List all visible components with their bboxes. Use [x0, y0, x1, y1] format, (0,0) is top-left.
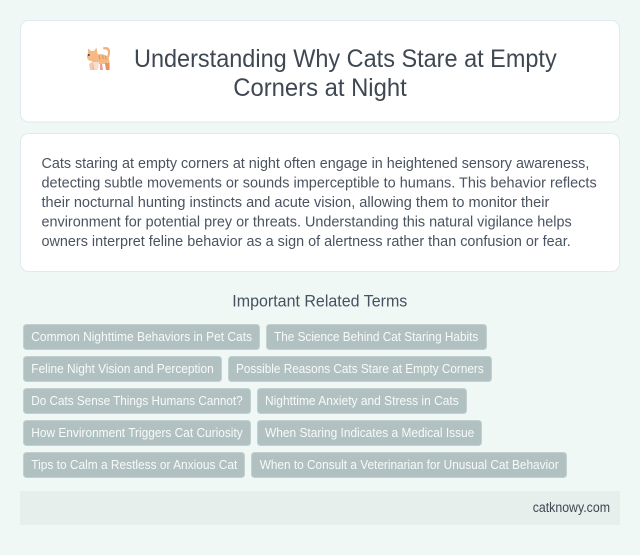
title — [134, 45, 557, 102]
tag — [266, 324, 486, 350]
footer bar — [20, 491, 620, 525]
tag — [228, 356, 492, 382]
panel: description card — [20, 134, 620, 272]
tag: Tips to Calm a Restless or Anxious Cat — [31, 457, 238, 472]
tag — [252, 452, 566, 478]
tag — [24, 420, 250, 446]
tag — [24, 324, 260, 350]
description text: detecting subtle movements or sounds imperceptible to humans. This behavior reflects — [42, 174, 597, 192]
icon: cat — [87, 47, 110, 70]
tag: The Science Behind Cat Staring Habits — [274, 329, 479, 344]
tag — [24, 356, 222, 382]
footer text: catknowy.com — [533, 500, 610, 515]
title: Understanding Why Cats Stare at Empty — [134, 45, 557, 73]
tag: Possible Reasons Cats Stare at Empty Corners — [236, 361, 484, 376]
tag — [258, 420, 482, 446]
tag: Feline Night Vision and Perception — [31, 361, 214, 376]
panel: title card — [20, 20, 620, 122]
tag: How Environment Triggers Cat Curiosity — [31, 425, 243, 440]
title: Corners at Night — [233, 74, 407, 102]
tag: When Staring Indicates a Medical Issue — [265, 425, 474, 440]
panel: related term tags — [24, 324, 566, 478]
description text: Cats staring at empty corners at night often engage in heightened sensory awareness, — [42, 155, 589, 172]
tag: Nighttime Anxiety and Stress in Cats — [265, 393, 459, 408]
tag: When to Consult a Veterinarian for Unusual Cat Behavior — [260, 457, 559, 472]
description text — [42, 155, 597, 250]
heading: important related terms: Important Related Terms — [232, 293, 407, 311]
description text: environment for potential prey or threats. Understanding this natural vigilance helps — [42, 214, 572, 230]
tag — [24, 388, 250, 414]
tag: Do Cats Sense Things Humans Cannot? — [31, 393, 243, 408]
tag: Common Nighttime Behaviors in Pet Cats — [31, 329, 252, 344]
tag — [24, 452, 244, 478]
description text: owners interpret feline behavior as a sign of alertness rather than confusion or fear. — [42, 233, 571, 250]
description text: their nocturnal hunting instincts and acute vision, allowing them to monitor their — [42, 194, 549, 211]
tag — [258, 388, 466, 414]
